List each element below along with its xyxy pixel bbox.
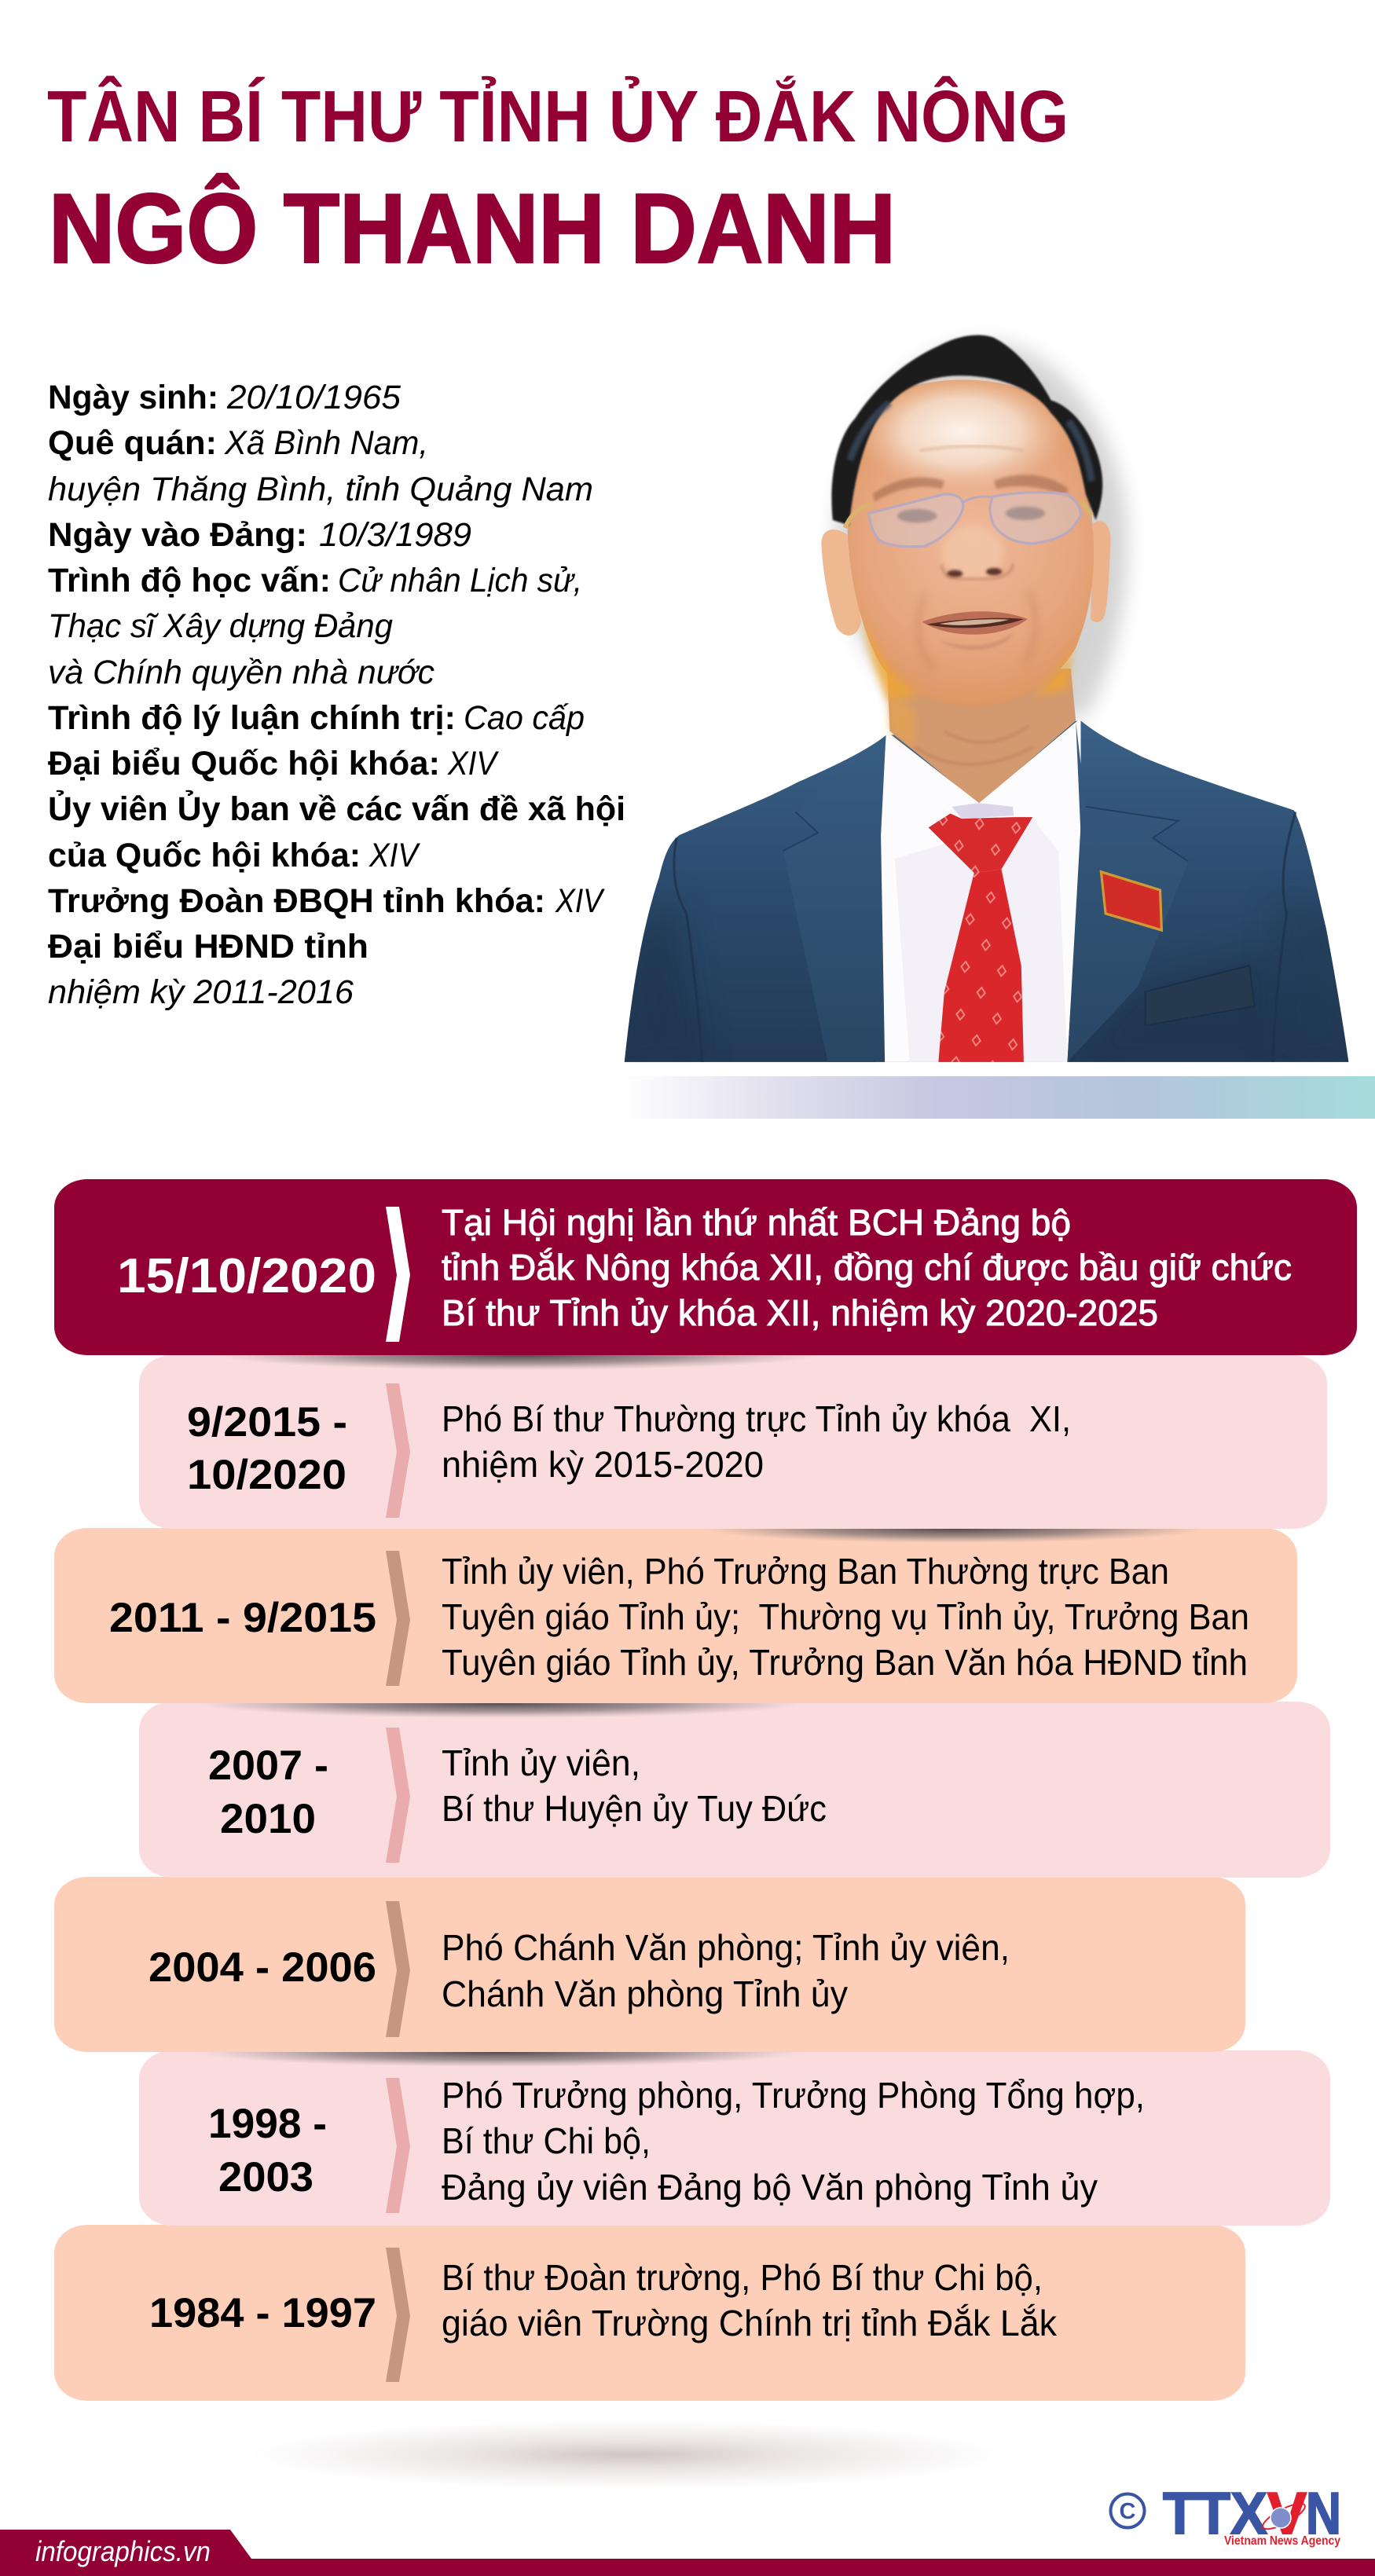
- date: 2007 -: [208, 1742, 328, 1789]
- shadow under row 5: [197, 2037, 802, 2067]
- biography text block: Trưởng Đoàn ĐBQH tỉnh khóa:: [48, 882, 545, 920]
- nose: [942, 526, 1013, 580]
- arrow: [386, 2078, 410, 2213]
- ears: [821, 521, 1111, 636]
- footer site name: infographics.vn: [35, 2535, 211, 2567]
- date: 2003: [218, 2154, 314, 2200]
- timeline row 1: 15/10/2020: [54, 1179, 1357, 1355]
- date: [208, 1742, 328, 1842]
- arrow: [386, 2248, 410, 2382]
- description: Tuyên giáo Tỉnh ủy, Trưởng Ban Văn hóa HĐND tỉnh: [442, 1642, 1248, 1683]
- biography text block: Cử nhân Lịch sử,: [338, 562, 582, 599]
- neck: [887, 669, 1076, 804]
- date: 10/2020: [187, 1452, 346, 1498]
- forehead highlight: [855, 372, 1069, 492]
- badge pin: [1101, 872, 1161, 930]
- neck lower cheek glow: [887, 690, 915, 747]
- biography text block: Thạc sĩ Xây dựng Đảng: [48, 607, 393, 645]
- wordmark: V: [1267, 2480, 1307, 2546]
- biography text block: nhiệm kỳ 2011-2016: [48, 973, 354, 1011]
- tie: [929, 813, 1032, 1062]
- description: Đảng ủy viên Đảng bộ Văn phòng Tỉnh ủy: [442, 2167, 1098, 2208]
- title line 2: name: NGÔ THANH DANH: [49, 174, 896, 284]
- timeline row 3: 2011 - 9/2015: [54, 1528, 1297, 1703]
- pocket: [1146, 966, 1254, 1025]
- shirt: [875, 718, 1081, 1062]
- biography text block: huyện Thăng Bình, tỉnh Quảng Nam: [48, 471, 593, 508]
- description: Bí thư Huyện ủy Tuy Đức: [442, 1788, 827, 1829]
- biography text block: XIV: [555, 882, 606, 920]
- biography text block: Ủy viên Ủy ban về các vấn đề xã hội: [48, 790, 625, 828]
- glasses: [845, 493, 1091, 547]
- globe: [1260, 2499, 1308, 2534]
- neck lines: [915, 726, 1034, 764]
- date: 9/2015 -: [187, 1399, 347, 1446]
- agency name: Vietnam News Agency: [1224, 2534, 1340, 2548]
- wordmark: TTX: [1163, 2480, 1267, 2546]
- timeline row 4: 2007 - 2010: [139, 1702, 1330, 1878]
- timeline row 7: 1984 - 1997: [54, 2225, 1245, 2401]
- lapel edges: [783, 807, 1189, 861]
- biography text block: 20/10/1965: [226, 379, 402, 416]
- description: [442, 1551, 1249, 1683]
- shadow under row 1: [216, 1340, 821, 1370]
- soft shadow behind head: [835, 343, 1128, 717]
- description: giáo viên Trường Chính trị tỉnh Đắk Lắk: [442, 2303, 1058, 2343]
- date: 1984 - 1997: [149, 2290, 376, 2336]
- description: [442, 1927, 1010, 2014]
- description: Tại Hội nghị lần thứ nhất BCH Đảng bộ: [442, 1202, 1071, 1243]
- hair sheen: [850, 403, 1091, 481]
- description: Phó Chánh Văn phòng; Tỉnh ủy viên,: [442, 1927, 1010, 1968]
- date: [187, 1399, 347, 1498]
- biography text block: Đại biểu HĐND tỉnh: [48, 928, 368, 966]
- bottom soft shadow: [250, 2420, 1004, 2490]
- orange cheek light: [860, 611, 1076, 700]
- description: nhiệm kỳ 2015-2020: [442, 1444, 764, 1485]
- description: tỉnh Đắk Nông khóa XII, đồng chí được bầu giữ chức: [442, 1247, 1292, 1288]
- copyright symbol: C: [1120, 2499, 1136, 2524]
- shirt collar shadow: [895, 817, 1067, 1062]
- copyright symbol: [1111, 2494, 1144, 2528]
- description: Tỉnh ủy viên, Phó Trưởng Ban Thường trực Ban: [442, 1551, 1169, 1592]
- description: Tỉnh ủy viên,: [442, 1742, 640, 1783]
- description: Bí thư Chi bộ,: [442, 2120, 651, 2161]
- biography text block: Quê quán:: [48, 424, 217, 462]
- timeline row 6: 1998 - 2003: [139, 2050, 1330, 2226]
- shadow under row 2: [703, 1515, 1206, 1543]
- wordmark: N: [1306, 2480, 1341, 2546]
- biography text block: Trình độ lý luận chính trị:: [48, 699, 456, 737]
- eyes: [897, 507, 1045, 522]
- shadow under row 3: [197, 1688, 802, 1718]
- description: [442, 1742, 827, 1829]
- description: [442, 1398, 1071, 1485]
- right lapel: [1067, 722, 1189, 1062]
- description: Phó Trưởng phòng, Trưởng Phòng Tổng hợp,: [442, 2075, 1145, 2116]
- date: [208, 2101, 327, 2200]
- title line 1: TÂN BÍ THƯ TỈNH ỦY ĐẮK NÔNG: [47, 75, 1069, 157]
- portrait photo illustration: [617, 335, 1356, 1062]
- description: [442, 2257, 1058, 2343]
- biography text block: Ngày vào Đảng:: [48, 516, 307, 554]
- left lapel: [783, 736, 886, 1062]
- description: Chánh Văn phòng Tỉnh ủy: [442, 1973, 848, 2014]
- biography text block: của Quốc hội khóa:: [48, 837, 361, 874]
- title: [47, 75, 1069, 284]
- biography text block: [48, 379, 625, 1011]
- biography text block: XIV: [368, 837, 421, 874]
- biography text block: Xã Bình Nam,: [224, 424, 428, 462]
- description: Tuyên giáo Tỉnh ủy; Thường vụ Tỉnh ủy, Trưởng Ban: [442, 1596, 1249, 1637]
- date: 2011 - 9/2015: [109, 1595, 376, 1641]
- description: Phó Bí thư Thường trực Tỉnh ủy khóa XI,: [442, 1398, 1071, 1439]
- gradient band under photo: [621, 1076, 1375, 1119]
- date: 15/10/2020: [117, 1249, 376, 1303]
- face shading: [918, 591, 1036, 669]
- sleeve seams: [674, 812, 1296, 1062]
- biography text block: Đại biểu Quốc hội khóa:: [48, 745, 440, 782]
- biography text block: Cao cấp: [464, 699, 585, 737]
- face: [848, 379, 1094, 706]
- lavender collar band: [952, 803, 1014, 819]
- hair: [831, 335, 1102, 526]
- arrow: [386, 1551, 410, 1686]
- arrow: [386, 1728, 410, 1863]
- description: Bí thư Tỉnh ủy khóa XII, nhiệm kỳ 2020-2025: [442, 1292, 1158, 1333]
- forehead wrinkle: [919, 446, 1024, 451]
- date: 2004 - 2006: [148, 1944, 376, 1991]
- mouth: [922, 611, 1028, 650]
- arrow: [386, 1901, 410, 2037]
- biography text block: XIV: [447, 745, 500, 782]
- date: 1998 -: [208, 2101, 327, 2147]
- date: 2010: [220, 1796, 316, 1842]
- biography text block: và Chính quyền nhà nước: [48, 654, 434, 691]
- biography text block: Ngày sinh:: [48, 379, 218, 416]
- timeline row 5: 2004 - 2006: [54, 1877, 1245, 2052]
- description: [442, 2075, 1145, 2208]
- description: [442, 1202, 1292, 1333]
- logo: TTXVN: [1111, 2480, 1341, 2548]
- arrow: [386, 1207, 410, 1342]
- biography text block: 10/3/1989: [319, 516, 471, 554]
- eyebrows: [872, 475, 1069, 502]
- timeline row 2: 9/2015 - 10/2020: [139, 1355, 1327, 1529]
- arrow: [386, 1383, 410, 1518]
- description: Bí thư Đoàn trường, Phó Bí thư Chi bộ,: [442, 2257, 1043, 2298]
- jacket dark folds: [617, 898, 1356, 1062]
- footer band: [0, 2530, 1375, 2576]
- wordmark: [1163, 2480, 1341, 2546]
- jacket: [625, 720, 1348, 1062]
- biography text block: Trình độ học vấn:: [48, 562, 331, 599]
